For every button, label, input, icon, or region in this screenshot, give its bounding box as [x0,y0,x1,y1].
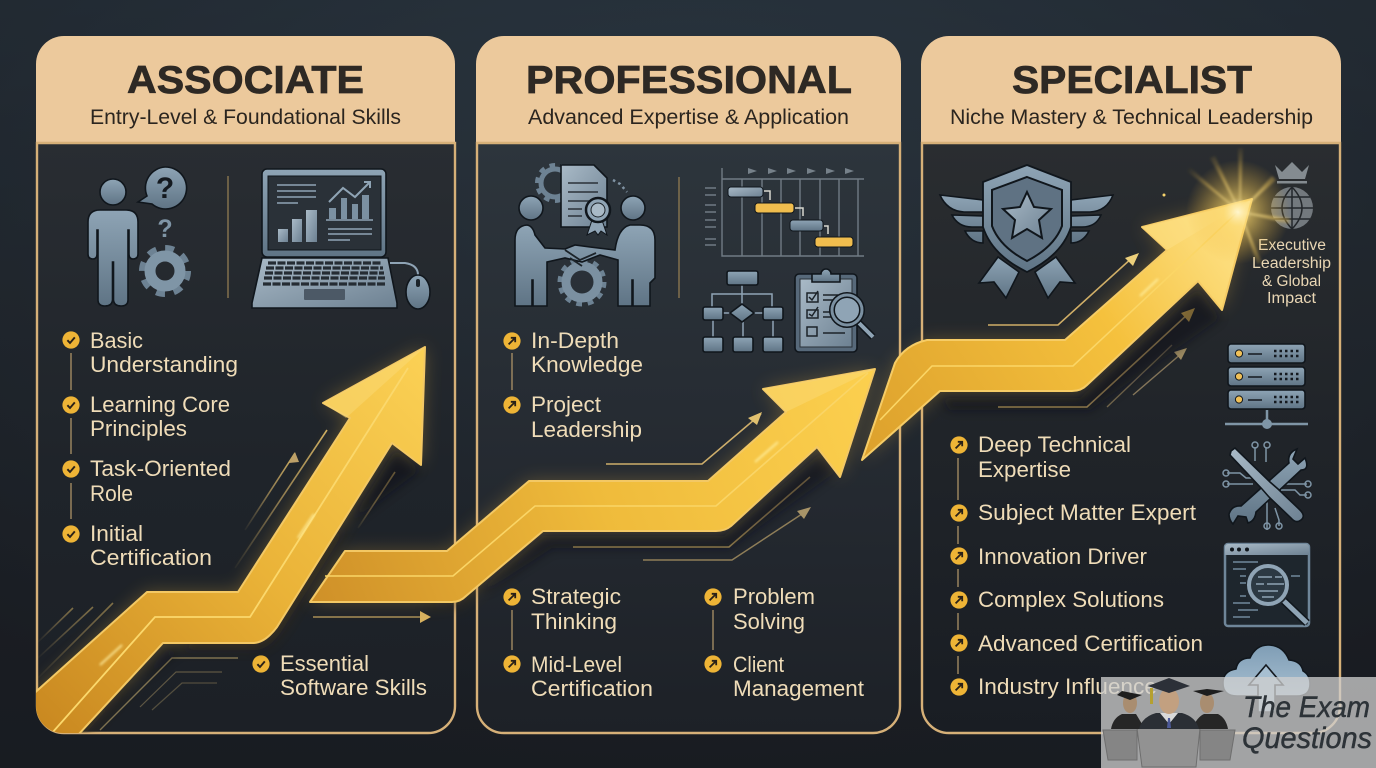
list: professional upper skills [503,328,643,442]
watermark text: The Exam [1243,691,1370,724]
text: executive leadership and global impact [1252,237,1331,307]
item: Problem Solving: Problem [733,584,815,609]
heading: associate: ASSOCIATE [127,59,364,102]
arrow 2: professional growth arrow [310,369,875,610]
item: Task-Oriented Role: Role [90,481,133,506]
watermark: The Exam Questions: Questions [1242,722,1372,755]
subheading: associate: Entry-Level & Foundational Skills [90,105,401,129]
item: Initial Certification [62,521,212,570]
heading: professional: PROFESSIONAL [526,59,852,102]
item: Subject Matter Expert: Subject Matter Expert [978,500,1196,525]
text: executive leadership and global impact: Executive [1258,237,1326,254]
item: In-Depth Knowledge [503,328,643,377]
arrow 3: specialist growth arrow with starburst [862,148,1290,460]
icon: person with questions and gear [88,167,188,306]
icon: crown and globe [1271,162,1313,229]
item: Deep Technical Expertise [950,432,1131,482]
item: Deep Technical Expertise: Deep Technical [978,432,1131,457]
icon: server rack [1225,344,1308,429]
panel: specialist [921,36,1341,733]
text: executive leadership and global impact: Leadership [1252,255,1331,272]
item: Problem Solving [704,584,815,634]
item: Task-Oriented Role: Task-Oriented [90,456,231,481]
item: Mid-Level Certification: Mid-Level [531,652,622,677]
watermark: The Exam Questions [1101,677,1376,768]
item: Problem Solving: Solving [733,609,805,634]
item: Essential Software Skills: Software Skills [280,675,427,700]
item: Project Leadership: Project [531,392,601,417]
accent lines: professional [573,412,811,560]
divider [227,176,229,298]
list: associate skills [62,328,238,570]
item: Advanced Certification: Advanced Certification [978,631,1203,656]
item: Innovation Driver: Innovation Driver [978,544,1147,569]
item: Basic Understanding [62,328,238,377]
item: Mid-Level Certification: Certification [531,676,653,701]
item: Strategic Thinking: Strategic [531,584,621,609]
heading: specialist: SPECIALIST [1012,59,1252,102]
icon: flowchart [703,271,783,352]
item: Industry Influence: Industry Influence [978,674,1157,699]
icon: browser window with magnifier [1225,544,1309,626]
item: Essential Software Skills: Essential [280,651,369,676]
item: Client Management [704,652,864,701]
text: executive leadership and global impact: Impact [1267,290,1317,307]
item: In-Depth Knowledge: Knowledge [531,352,643,377]
icon: winged shield with star [940,165,1113,298]
item: Essential Software Skills [252,651,427,700]
list: professional lower skills [503,584,864,701]
watermark graduates and laptops [1103,678,1235,767]
item: Learning Core Principles: Principles [90,416,187,441]
item: Project Leadership [503,392,642,442]
icon: clipboard with magnifier [795,269,873,352]
item: Initial Certification: Certification [90,545,212,570]
item: Strategic Thinking: Thinking [531,609,617,634]
icon: laptop with charts and mouse [252,169,430,309]
text: executive leadership and global impact: & Global [1262,273,1321,290]
item: Client Management: Client [733,652,784,677]
accent lines: associate [38,430,431,730]
icon: handshake with document and gears [515,165,655,306]
item: Initial Certification: Initial [90,521,143,546]
icon: person with questions and gear: ? [157,215,173,243]
item: Task-Oriented Role [62,456,231,506]
divider [678,177,680,298]
item: Project Leadership: Leadership [531,417,642,442]
item: Client Management: Management [733,676,864,701]
accent lines: specialist [988,253,1195,407]
chart: gantt timeline [705,168,864,256]
icon: cloud upload [1223,645,1310,712]
item: Strategic Thinking [503,584,621,634]
item: Deep Technical Expertise: Expertise [978,457,1071,482]
subheading: professional: Advanced Expertise & Application [528,105,849,129]
item: In-Depth Knowledge: In-Depth [531,328,619,353]
icon: person with questions and gear: ? [156,172,174,205]
item: Mid-Level Certification [503,652,653,701]
subheading: specialist: Niche Mastery & Technical Leadership [950,105,1313,129]
item: Learning Core Principles [62,392,230,441]
item: Basic Understanding: Basic [90,328,143,353]
arrow 1: associate growth arrow [30,347,425,740]
item: Learning Core Principles: Learning Core [90,392,230,417]
item: Basic Understanding: Understanding [90,352,238,377]
panel: professional [476,36,901,733]
panel: associate [36,36,455,733]
item: Complex Solutions: Complex Solutions [978,587,1164,612]
list: specialist skills [950,432,1203,699]
icon: crossed tools with circuit lines [1223,442,1311,530]
